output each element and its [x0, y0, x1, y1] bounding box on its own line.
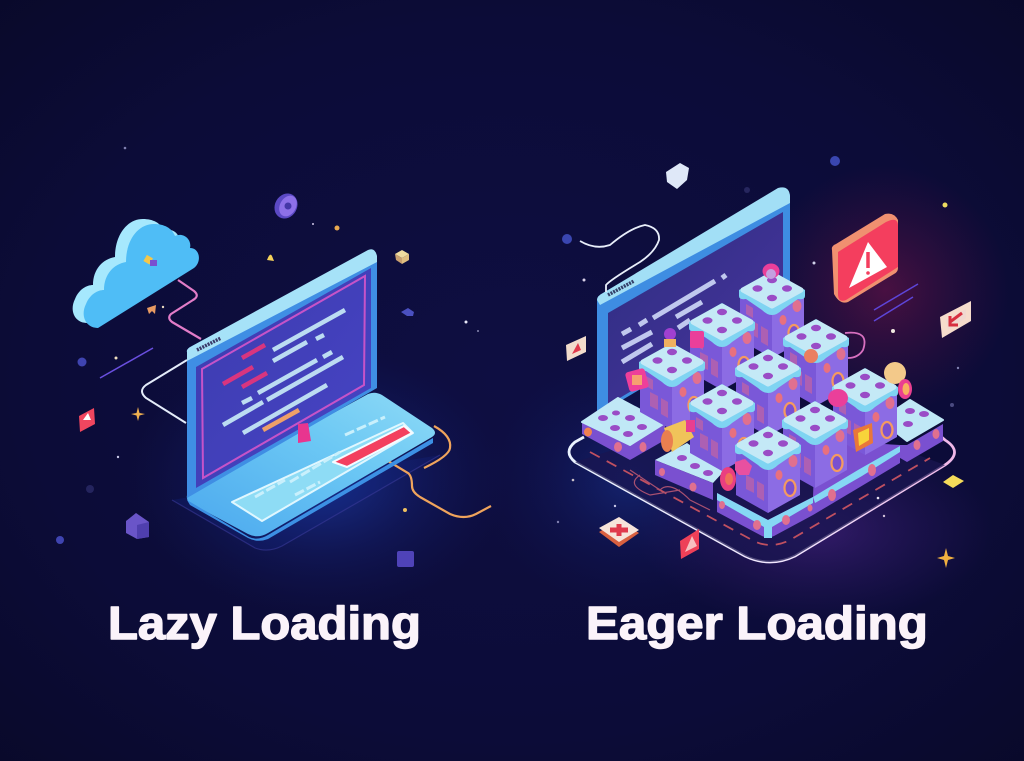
hinge tab — [298, 423, 311, 443]
icon: small cube — [395, 250, 409, 264]
wire: orange short — [424, 426, 450, 468]
wire: pink loop — [845, 333, 865, 358]
sparkle — [937, 548, 955, 568]
platform dashes — [590, 452, 930, 545]
widget: yellow cylinder — [661, 420, 695, 452]
slab: mid right — [813, 440, 900, 515]
platform outline — [569, 434, 954, 562]
platform traces — [630, 470, 710, 510]
laptop top band — [187, 249, 377, 361]
platform fill — [575, 400, 945, 562]
glow: right blue — [480, 350, 780, 610]
icon: yellow diamond — [943, 475, 964, 488]
lines by alert — [874, 284, 918, 321]
cube: left — [639, 343, 705, 430]
widget: pink ring top — [762, 264, 780, 279]
title: Lazy Loading: Lazy Loading — [108, 598, 421, 650]
icon: orange arrow — [147, 305, 156, 314]
icon: puzzle card — [599, 517, 639, 547]
icon: red triangle tag — [680, 529, 699, 559]
line — [100, 348, 153, 378]
laptop screen — [196, 268, 371, 488]
icon: red tag — [79, 408, 95, 432]
widget: pink cube bottom — [735, 459, 752, 475]
shadow plate under laptop — [172, 455, 440, 550]
cube: lower right — [782, 401, 848, 488]
icon: left card — [566, 336, 586, 361]
widget: figure on left cube — [664, 328, 676, 347]
widget: pink small — [690, 331, 704, 348]
icon: diamond chip — [401, 308, 414, 316]
icon: cloud badge — [143, 255, 157, 266]
slab: left — [582, 398, 665, 460]
monitor bezel — [597, 189, 790, 415]
cube: upper right — [783, 319, 849, 406]
monitor screen — [608, 212, 783, 405]
monitor bars — [622, 275, 726, 362]
cube: front — [735, 426, 801, 513]
keyboard plate — [232, 417, 413, 521]
slab: front — [717, 493, 813, 538]
cube: upper left — [689, 303, 755, 390]
icon: red arrow card — [940, 301, 971, 338]
slab: right back — [880, 400, 943, 462]
wire: white — [580, 225, 659, 292]
glow: right red — [760, 165, 1010, 415]
wire: white screen link — [142, 360, 187, 423]
stars — [557, 156, 959, 523]
sparkle — [131, 407, 145, 421]
cube: back center — [739, 271, 805, 358]
monitor top band — [597, 187, 790, 305]
laptop screen bezel — [187, 251, 377, 498]
widget: pink ring bottom — [720, 467, 736, 491]
laptop base — [187, 393, 435, 536]
wire: orange long — [388, 461, 491, 517]
slab: front left — [655, 443, 725, 500]
icon: ring token — [270, 189, 302, 223]
widget: yellow chip — [853, 423, 873, 452]
bezel caption mark — [197, 338, 221, 350]
icon: folder cube — [126, 513, 149, 539]
icon: shield gem — [666, 163, 689, 189]
title: Eager Loading: Eager Loading — [586, 598, 928, 650]
glow: right purple — [635, 435, 995, 625]
panel: lazy loading illustration — [56, 147, 491, 567]
widget: mid pink — [804, 349, 818, 363]
icon: alert sign — [832, 214, 898, 303]
icon: cloud — [73, 219, 199, 328]
cube: right — [832, 368, 898, 455]
wire: pink cloud link — [169, 280, 201, 339]
bezel caption mark — [608, 281, 634, 295]
screen magenta outline — [202, 276, 365, 478]
bell shape — [267, 255, 274, 261]
stars — [56, 147, 479, 544]
icon: square — [397, 551, 414, 567]
widget: coin — [884, 362, 912, 399]
code lines — [223, 310, 345, 433]
laptop base edge — [187, 438, 433, 541]
cube: center — [735, 349, 801, 436]
panel: eager loading illustration — [557, 156, 971, 568]
cube: lower left — [689, 384, 755, 471]
glow: left — [130, 345, 510, 615]
red button — [333, 426, 412, 467]
widget: pink connector — [828, 389, 848, 407]
widget: pink square left — [625, 368, 649, 392]
